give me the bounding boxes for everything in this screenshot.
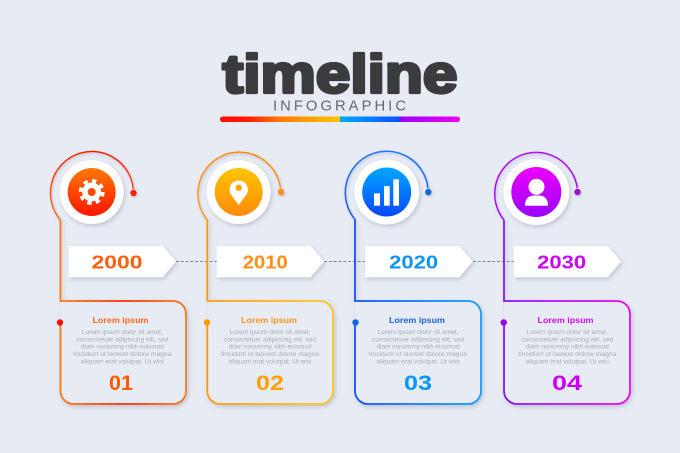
step 3 text: aliquam erat volutpat. Ut wisi [376,358,460,365]
step 3 card outline [355,220,481,404]
step 3 text: consectetuer adipiscing elit, sed [372,336,465,343]
step 2 card outline [207,220,333,404]
step 2 arc [198,152,280,220]
step 3 card dot [352,319,359,326]
step 2 year banner: 2010 [243,251,288,272]
step 3 year banner: 2020 [389,251,438,272]
step 2 text: aliquam erat volutpat. Ut wisi [228,358,312,365]
step 2 text: Lorem ipsum [241,315,297,325]
step 1 year banner: 2000 [92,251,142,272]
step 1 year banner [69,246,176,277]
step 3 text: 03 [404,371,432,395]
step 4 text: diam nonummy nibh euismod [526,344,609,351]
step 2 text: tincidunt ut laoreet dolore magna [221,351,320,358]
step 4 text: aliquam erat volutpat. Ut wisi [526,358,609,365]
step 4 year banner: 2030 [537,251,586,272]
step 1 text: tincidunt ut laoreet dolore magna [73,351,172,358]
title [220,44,460,122]
icon: gear [60,160,124,224]
step 1 arc end dot [130,190,137,196]
step 2 text: consectetuer adipiscing elit, sed [224,336,317,343]
step 1 card outline [60,220,186,404]
icon: location pin [207,160,271,224]
step 4 text: Lorem ipsum [538,315,594,325]
step 1 [50,151,186,404]
step 1 text [73,315,172,395]
step 4 card dot [500,319,507,326]
step 2 [198,152,333,404]
step 1 text: Lorem ipsum [92,315,148,325]
step 1 card dot [57,319,63,326]
icon: bar chart [354,160,419,224]
step 3 arc end dot [425,189,431,195]
title: INFOGRAPHIC [273,98,406,114]
step 4 arc end dot [574,189,581,195]
step 4 text: Lorem ipsum dolor sit amet, [527,329,608,336]
step 3 arc [345,151,428,220]
step 1 arc [50,151,133,220]
step 3 text: tincidunt ut laoreet dolore magna [369,351,468,358]
step 2 text: Lorem ipsum dolor sit amet, [230,329,311,336]
step 3 year banner [365,246,473,277]
step 4 [495,152,630,404]
step 4 year banner [514,246,621,277]
icon: person [503,159,569,225]
step 2 card dot [204,319,210,326]
step 2 text: diam nonummy nibh euismod [228,344,312,351]
step 3 text: Lorem ipsum dolor sit amet, [378,329,459,336]
step 1 text: 01 [109,371,133,395]
step 2 year banner [217,246,324,277]
step 4 arc [495,152,577,220]
step 3 text [369,315,468,395]
step 4 card outline [504,220,630,404]
step 1 text: aliquam erat volutpat. Ut wisi [81,358,164,365]
step 2 text: 02 [256,371,284,395]
title: timeline [222,44,458,104]
step 1 text: diam nonummy nibh euismod [81,344,164,351]
dashed timeline connector [176,260,514,262]
step 3 text: diam nonummy nibh euismod [376,344,460,351]
step 2 text [221,315,320,395]
step 4 text: tincidunt ut laoreet dolore magna [518,351,617,358]
step 4 text: 04 [552,371,582,395]
step 4 text [518,315,617,395]
step 4 text: consectetuer adipiscing elit, sed [521,336,614,343]
step 3 text: Lorem ipsum [389,315,445,325]
step 1 text: consectetuer adipiscing elit, sed [76,336,169,343]
step 3 [345,151,481,404]
step 1 text: Lorem ipsum dolor sit amet, [82,329,163,336]
step 2 arc end dot [278,189,284,195]
